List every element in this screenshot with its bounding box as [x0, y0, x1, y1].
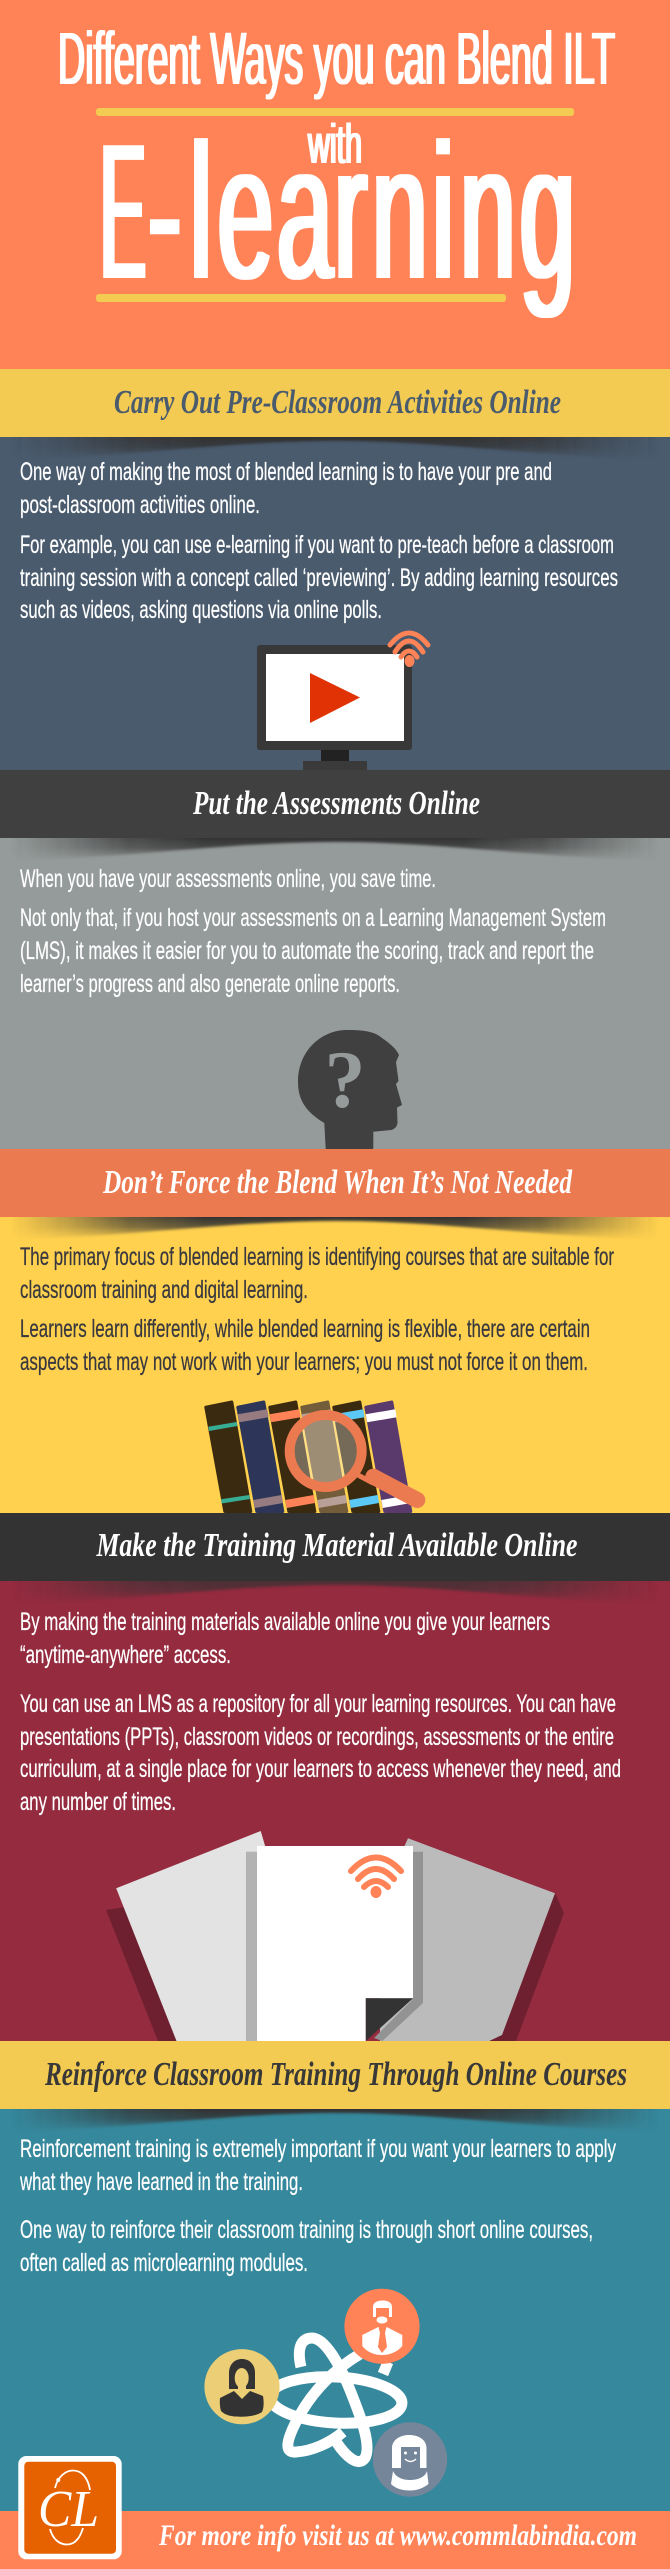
banner: don't force the blend heading [0, 1149, 670, 1217]
banner: pre-classroom activities heading [0, 369, 670, 437]
decorative bar: top [96, 108, 574, 116]
panel: reinforce through online courses [0, 2105, 670, 2511]
text block: assessments: learner’s progress and also generate online reports. [20, 970, 400, 998]
text block: assessments: When you have your assessments online, you save time. [20, 865, 436, 893]
text block: don't force the blend: classroom training and digital learning. [20, 1276, 308, 1304]
icon: girl [373, 2422, 447, 2497]
footer band [0, 2511, 670, 2569]
banner: training material heading [0, 1513, 670, 1581]
banner: assessments heading: Put the Assessments Online [192, 785, 480, 822]
icon: atom with learners [204, 2289, 447, 2497]
icon: video monitor [257, 633, 428, 770]
text block: training material: “anytime-anywhere” access. [20, 1641, 231, 1669]
title: E-learning: -learning [148, 104, 575, 319]
text block: pre-classroom activities: post-classroom activities online. [20, 491, 260, 519]
logo: CL [18, 2456, 122, 2559]
panel: don't force the blend [0, 1213, 670, 1513]
text block: reinforce: often called as microlearning modules. [20, 2249, 308, 2277]
text block: pre-classroom activities [20, 458, 618, 624]
title: with: with [307, 112, 362, 175]
icon: head with question mark [298, 1030, 402, 1149]
text block: assessments [20, 865, 606, 998]
icon: man [344, 2289, 420, 2364]
title: E-learning: E [100, 104, 146, 319]
panel: training material online [0, 1577, 670, 2041]
decorative bar: bottom [96, 294, 506, 302]
icon: head with question mark: ? [324, 1034, 366, 1125]
icon: woman [204, 2349, 280, 2424]
panel: assessments online [0, 834, 670, 1149]
icon: books with magnifying glass [206, 1402, 417, 1512]
text block: training material: any number of times. [20, 1788, 176, 1816]
logo: CL: CL [38, 2481, 99, 2538]
text block: training material [20, 1608, 621, 1816]
text block: don't force the blend [20, 1243, 614, 1376]
text block: reinforce [19, 2135, 616, 2277]
panel: pre-classroom activities [0, 433, 670, 770]
banner: assessments heading [0, 770, 670, 838]
panel: header [0, 0, 670, 369]
text block: pre-classroom activities: such as videos, asking questions via online polls. [20, 596, 382, 624]
icon: online documents [106, 1831, 564, 2041]
banner: reinforce heading [0, 2041, 670, 2109]
text block: reinforce: what they have learned in the training. [19, 2168, 303, 2196]
